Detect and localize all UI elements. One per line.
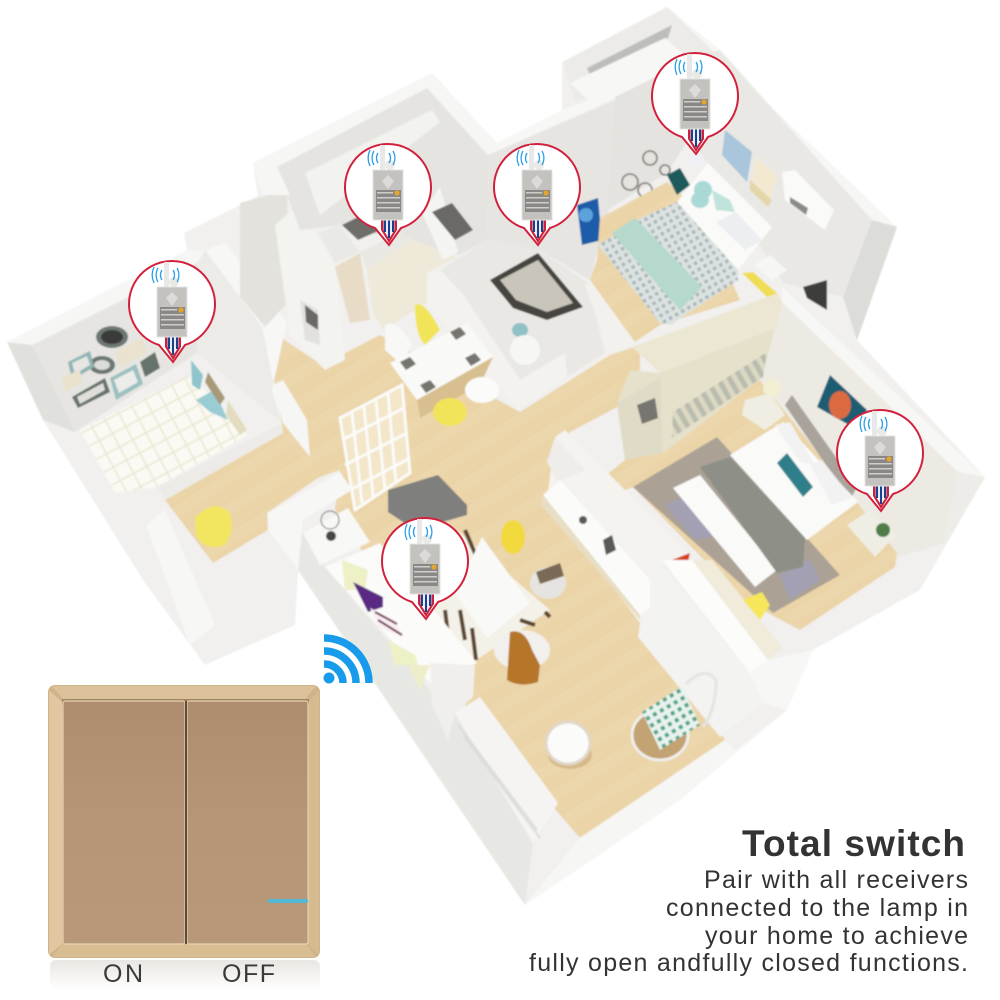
side table	[755, 255, 787, 280]
right wall	[690, 50, 872, 297]
body line 2: connected to the lamp in	[666, 894, 968, 922]
body line 3: your home to achieve	[705, 922, 968, 950]
yellow chair	[195, 506, 232, 547]
left bedroom wall	[32, 263, 197, 432]
wardrobe	[617, 293, 782, 460]
bedroom rug	[633, 437, 840, 613]
kitchen top band	[253, 73, 497, 195]
sofa cushions	[342, 560, 430, 690]
room: master bedroom	[600, 287, 985, 630]
wood floor	[265, 327, 725, 838]
pillows	[775, 422, 815, 465]
lattice screen	[340, 385, 410, 510]
top white ledge	[570, 38, 690, 102]
round side table	[530, 567, 566, 599]
hob	[342, 210, 385, 240]
floor of left bedroom	[165, 433, 318, 563]
bottom wall	[525, 710, 787, 905]
air conditioner	[782, 170, 834, 230]
room: bathroom	[427, 97, 640, 410]
bed bench	[673, 475, 777, 587]
half wall	[427, 270, 567, 410]
switch frame	[48, 685, 320, 958]
bed	[730, 422, 858, 540]
LED indicator	[268, 899, 308, 903]
yellow stool	[433, 398, 467, 426]
yellow chair by bed	[743, 592, 770, 620]
shower tray	[490, 253, 583, 320]
wardrobe block	[662, 560, 768, 673]
yellow stool	[501, 520, 525, 554]
picture frames	[62, 326, 160, 408]
receiver pin: kitchen	[345, 144, 431, 245]
green runner	[612, 218, 702, 310]
lamp left	[763, 379, 781, 397]
lower-left wall band	[298, 533, 533, 905]
right counter	[422, 187, 458, 260]
room: corridor storage	[240, 190, 345, 370]
dark vacuum	[803, 280, 827, 310]
bathroom floor	[440, 240, 605, 380]
plant	[876, 523, 890, 537]
check bed	[598, 202, 738, 325]
teal cushion	[777, 453, 813, 497]
kitchen wall	[277, 88, 488, 255]
wall art	[722, 130, 777, 207]
slippers	[512, 323, 528, 337]
side table	[303, 508, 370, 565]
left bedroom right wall	[197, 250, 282, 423]
wardrobe wall	[607, 60, 690, 210]
wall lamp	[690, 153, 704, 167]
icon: wifi signal	[324, 638, 369, 684]
round white table	[546, 722, 592, 769]
toilet	[510, 335, 540, 365]
partition wall	[547, 430, 690, 623]
sink	[432, 203, 473, 240]
cabinet	[146, 510, 215, 645]
wall top band	[667, 7, 897, 227]
wall top band	[782, 287, 985, 477]
receiver pin: bathroom	[494, 144, 580, 245]
upper bedroom floor	[590, 182, 740, 342]
room: living room	[268, 430, 813, 905]
caption	[529, 823, 968, 977]
receiver pin: master bedroom	[837, 410, 923, 511]
yellow dining chair	[415, 304, 440, 345]
mirror	[335, 253, 370, 323]
wall top corner	[268, 472, 352, 570]
room: left bedroom	[7, 243, 318, 645]
sofa	[325, 543, 477, 683]
back wall	[563, 7, 720, 100]
nightstand left	[742, 393, 785, 430]
grey ottoman	[388, 475, 467, 530]
kitchen counter	[318, 225, 360, 263]
TV console	[543, 480, 650, 615]
receiver pin: left bedroom	[129, 261, 215, 362]
OFF label: OFF	[222, 960, 275, 988]
ON label: ON	[103, 960, 143, 988]
upper cabinet	[305, 110, 440, 215]
zebra rug	[433, 530, 550, 663]
bathroom top band	[488, 97, 618, 155]
grey blanket	[700, 457, 805, 573]
blue shelf	[577, 198, 602, 245]
white dining chair	[385, 324, 412, 365]
hanging chair	[632, 673, 716, 760]
cabinet	[455, 697, 558, 843]
rocker gap	[185, 701, 187, 944]
body line 1: Pair with all receivers	[704, 866, 968, 894]
nightstand right	[847, 510, 896, 557]
teddy bear	[691, 181, 735, 212]
rug with grid	[80, 375, 248, 493]
wall fin	[273, 380, 310, 457]
right block	[585, 275, 640, 355]
room: dining area	[340, 304, 499, 510]
kitchen tile floor	[367, 240, 457, 330]
bedroom wall	[760, 302, 958, 557]
coffee table	[455, 537, 530, 638]
receiver pin: living room	[382, 518, 468, 619]
left rocker	[63, 701, 185, 944]
red decor	[672, 553, 690, 568]
room: upper bedroom	[563, 7, 897, 342]
pillow	[716, 212, 762, 250]
kitchen base cabinet	[360, 232, 413, 270]
heading: Total switch	[742, 823, 965, 864]
receiver pin: upper bedroom	[652, 53, 738, 154]
cushions	[191, 360, 247, 435]
body line 4: fully open andfully closed functions.	[529, 949, 968, 977]
switch reflection	[50, 960, 320, 990]
bathroom wall	[487, 100, 615, 280]
headboard	[785, 395, 857, 500]
white pillar	[430, 663, 475, 740]
white stool	[465, 377, 499, 403]
dining table	[390, 323, 493, 400]
red-blue painting	[817, 375, 867, 430]
armchair	[494, 630, 550, 685]
right rocker	[187, 701, 308, 944]
bedroom floor	[600, 380, 897, 630]
room: kitchen	[253, 73, 497, 330]
yellow item	[742, 272, 777, 300]
headboard	[677, 163, 772, 270]
wall switch	[48, 685, 320, 990]
green nightstand	[667, 168, 690, 195]
